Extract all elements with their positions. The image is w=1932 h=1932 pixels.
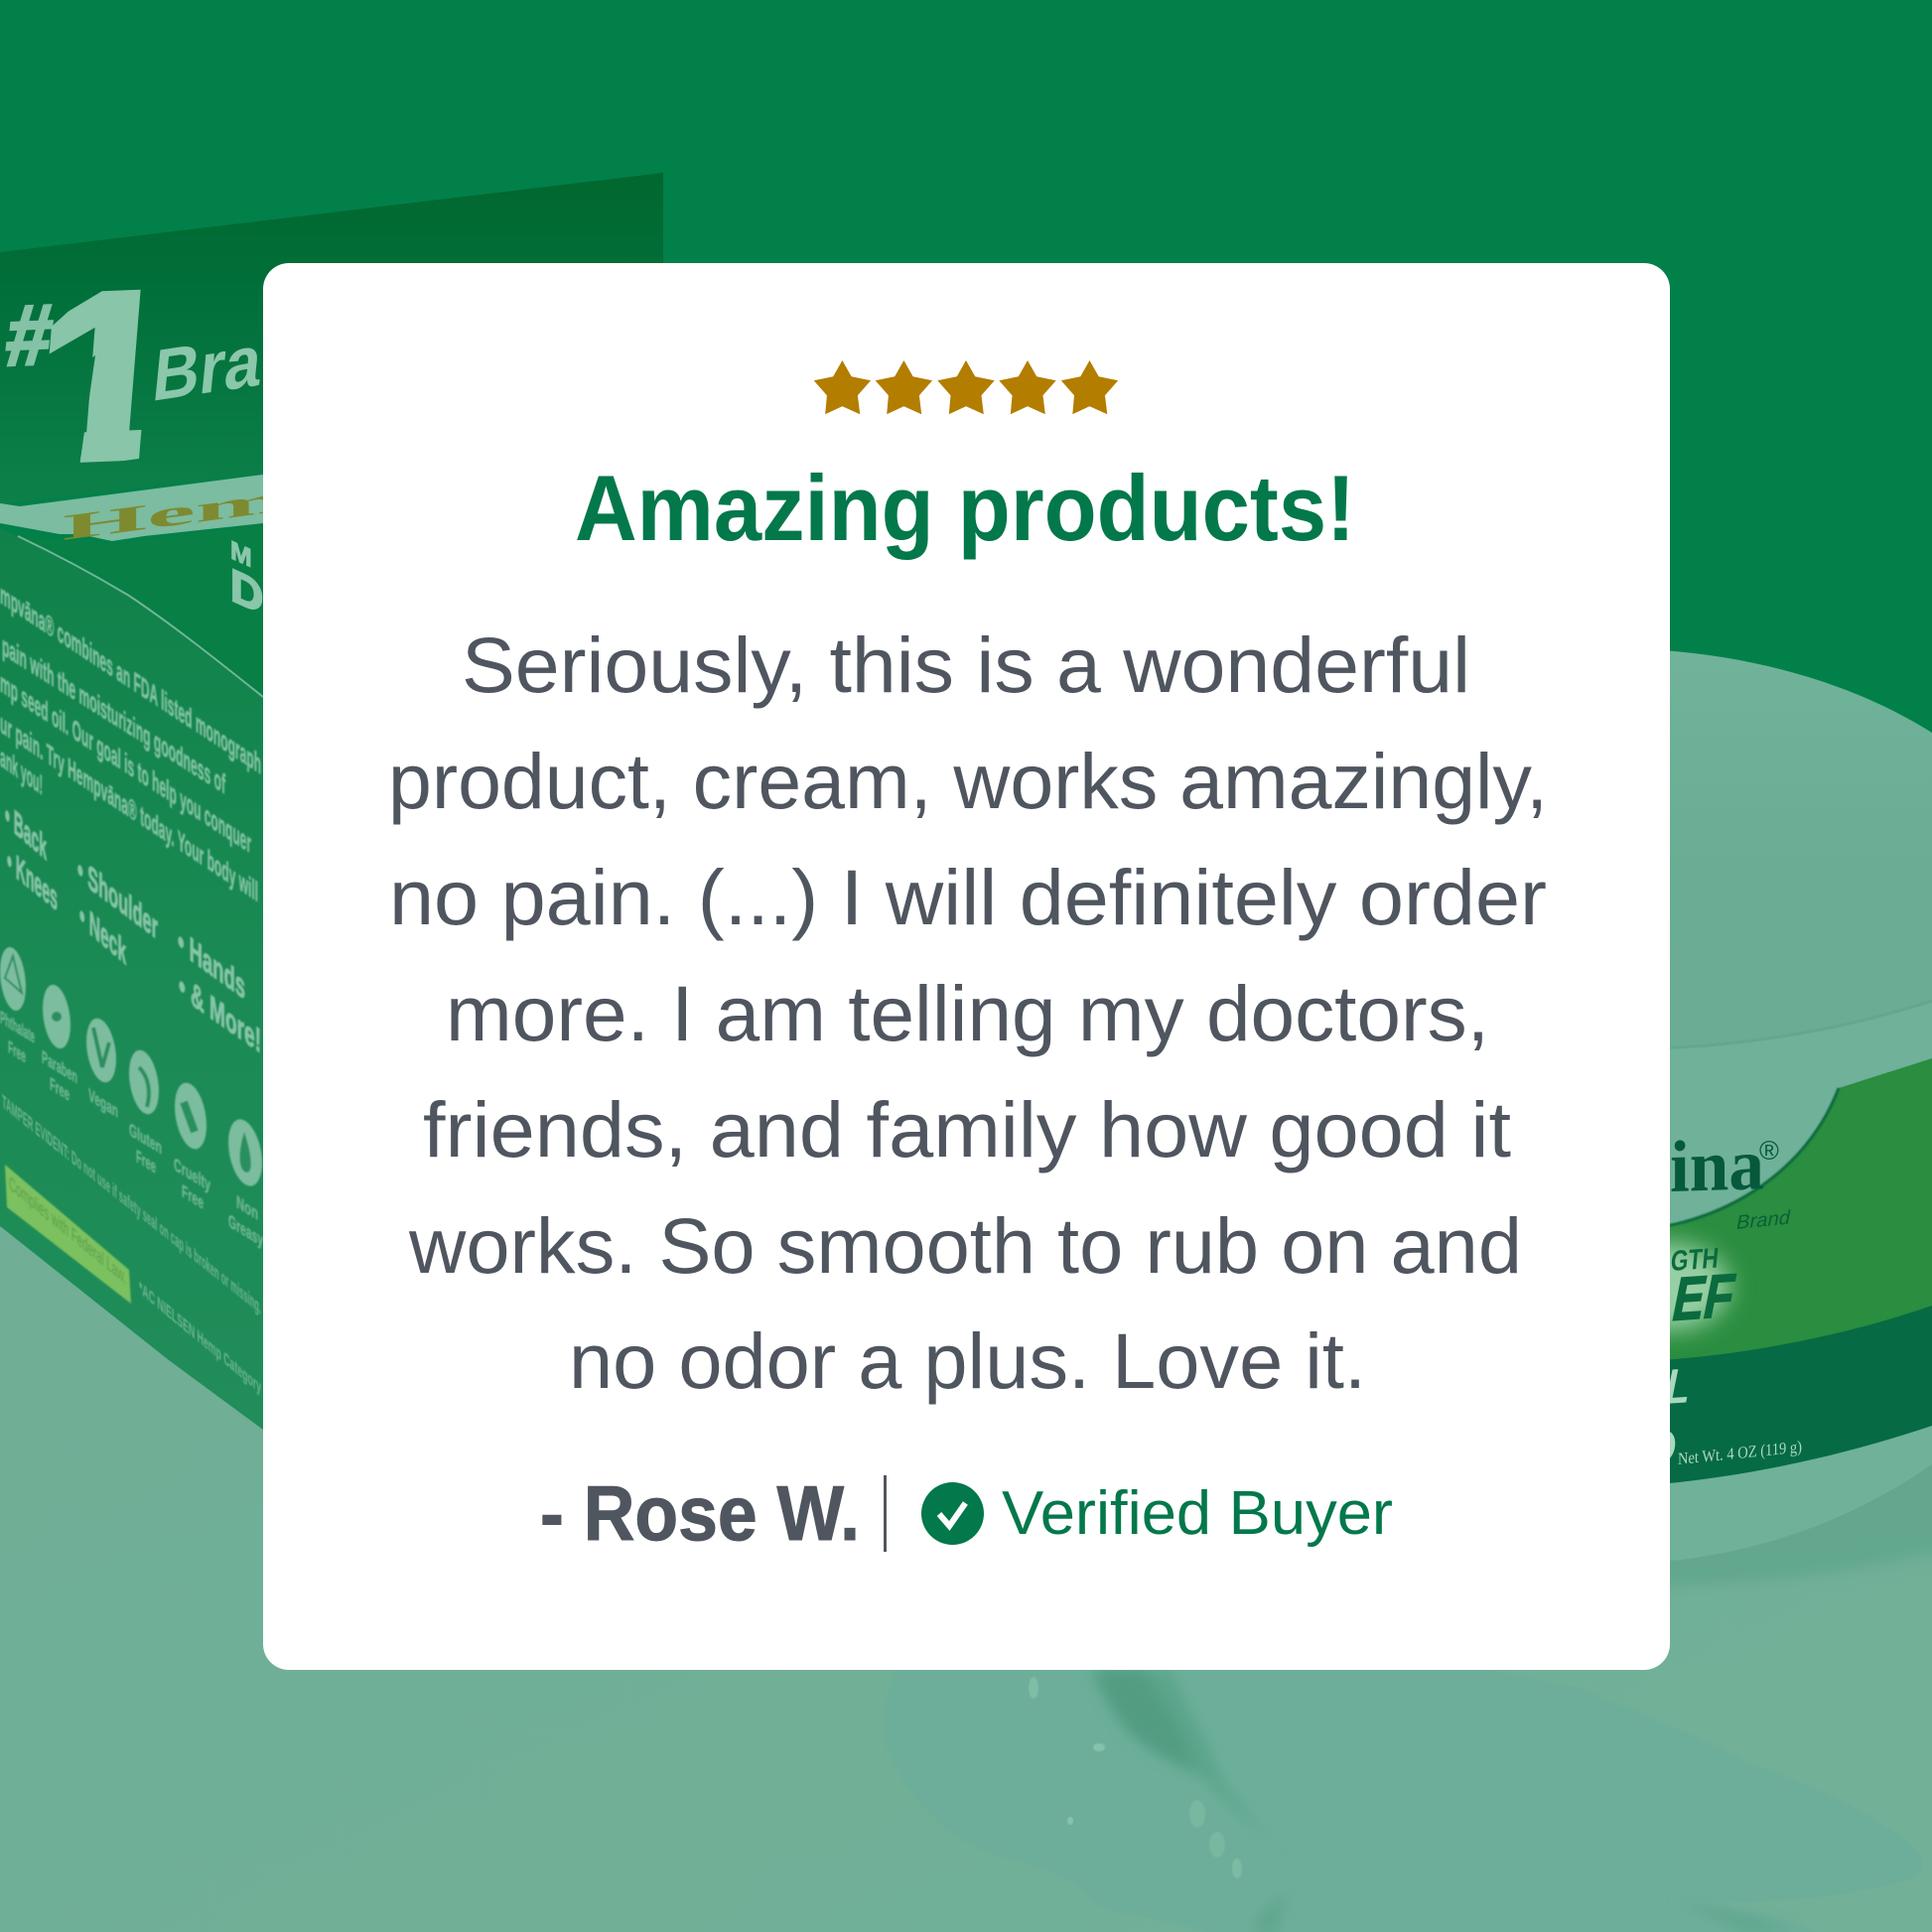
- side panel badge captions: Gluten: [129, 1119, 162, 1159]
- review text: works. So smooth to rub on and: [408, 1201, 1522, 1290]
- compliance badge: [5, 1165, 131, 1304]
- product photo: Hempvana box: [0, 173, 663, 1430]
- review text: [388, 621, 1548, 1405]
- product photo: Hempvana box: TAMPER EVIDENT: Do not use if safety seal on cap is broken or missing.: [2, 1091, 261, 1318]
- label white letter fragment: D: [1637, 1418, 1680, 1477]
- label green band: [1648, 1058, 1932, 1362]
- product photo: jar of cream: [1606, 649, 1932, 1587]
- side panel bullet list: • Hands: [178, 921, 245, 1008]
- jar body: [1648, 983, 1932, 1563]
- reviewer name: - Rose W.: [540, 1469, 860, 1557]
- label brand subtext: Brand: [1734, 1207, 1792, 1234]
- heading: Amazing products!: [575, 456, 1355, 560]
- side panel badge captions: [0, 1007, 263, 1252]
- jar lid: [1648, 649, 1932, 1046]
- verified buyer label: Verified Buyer: [1002, 1479, 1393, 1548]
- review text: friends, and family how good it: [423, 1085, 1511, 1173]
- review text: Seriously, this is a wonderful: [462, 621, 1470, 709]
- product photo: Hempvana box: mp seed oil. Our goal is to help you conquer: [0, 666, 251, 860]
- box front face: [0, 173, 663, 504]
- label net weight: Net Wt. 4 OZ (119 g): [1678, 1438, 1802, 1468]
- label strength text: GTH: [1669, 1243, 1720, 1278]
- side panel bullet list: [5, 795, 261, 1061]
- side panel badge captions: Non: [236, 1191, 258, 1225]
- side panel bullet list: • & More!: [179, 966, 261, 1061]
- label text glow: [1606, 1243, 1729, 1330]
- hash mark: #: [2, 286, 57, 383]
- box top flap: [18, 523, 263, 695]
- product photo: Hempvana box: *AC NIELSEN Hemp Category: [139, 1277, 261, 1399]
- side panel badge captions: Free: [8, 1036, 26, 1067]
- side panel badge captions: Greasy: [228, 1210, 263, 1252]
- name divider: [884, 1475, 887, 1552]
- flap text fragment: M: [230, 534, 252, 573]
- card background: [263, 263, 1670, 1670]
- big number one: 1: [22, 239, 191, 513]
- side panel badge captions: Free: [136, 1146, 156, 1178]
- product photo: Hempvana box: ur pain. Try Hempvāna® today. Your body will: [0, 707, 258, 908]
- review text: more. I am telling my doctors,: [446, 969, 1489, 1057]
- side panel badge captions: Cruelty: [174, 1154, 210, 1196]
- side panel paragraph: [0, 578, 261, 908]
- review card: [263, 263, 1670, 1670]
- side panel bullet list: • Knees: [7, 841, 58, 919]
- side panel bullet list: • Back: [5, 795, 47, 869]
- label brand name: ina: [1670, 1124, 1764, 1208]
- label dark band: [1648, 1306, 1932, 1485]
- side panel paragraph: ank you!: [0, 741, 43, 801]
- compliance badge: Complies with Federal Law.: [9, 1172, 126, 1289]
- side panel badge captions: Vegan: [88, 1084, 118, 1123]
- flap large text fragment: D: [230, 559, 263, 624]
- side panel bullet list: • Shoulder: [77, 850, 158, 948]
- product photo: Hempvana box: mpvāna® combines an FDA listed monograph: [0, 578, 261, 780]
- star rating: [814, 360, 1118, 414]
- background: pale floor: [0, 993, 1932, 1932]
- review text: product, cream, works amazingly,: [388, 737, 1548, 825]
- side panel feature badges: [0, 940, 262, 1194]
- side panel paragraph: pain with the moisturizing goodness of: [2, 629, 225, 801]
- jar floor shadow: [1628, 1390, 1932, 1587]
- review text: no odor a plus. Love it.: [569, 1316, 1366, 1405]
- box label strip: [0, 475, 263, 541]
- icon: verified check badge: [921, 1482, 984, 1545]
- box flap crease: [18, 536, 263, 697]
- review text: no pain. (...) I will definitely order: [389, 853, 1547, 941]
- registered mark: ®: [1759, 1136, 1779, 1166]
- side panel badge captions: Free: [182, 1180, 204, 1214]
- side panel badge captions: Phthalate: [0, 1007, 35, 1048]
- product photo: cream smear: [884, 1670, 1923, 1932]
- strip brand text: Hem: [63, 479, 286, 548]
- lid seam: [1648, 1001, 1932, 1048]
- brand text on box: Brand: [149, 307, 345, 417]
- label relief text: EF: [1667, 1261, 1740, 1334]
- side panel bullet list: • Neck: [79, 896, 126, 973]
- label curve edge: [1648, 1088, 1839, 1229]
- side panel badge captions: Paraben: [42, 1046, 77, 1088]
- side panel badge captions: Free: [50, 1073, 69, 1106]
- label white letter: L: [1661, 1357, 1697, 1415]
- box side panel: [0, 528, 263, 1430]
